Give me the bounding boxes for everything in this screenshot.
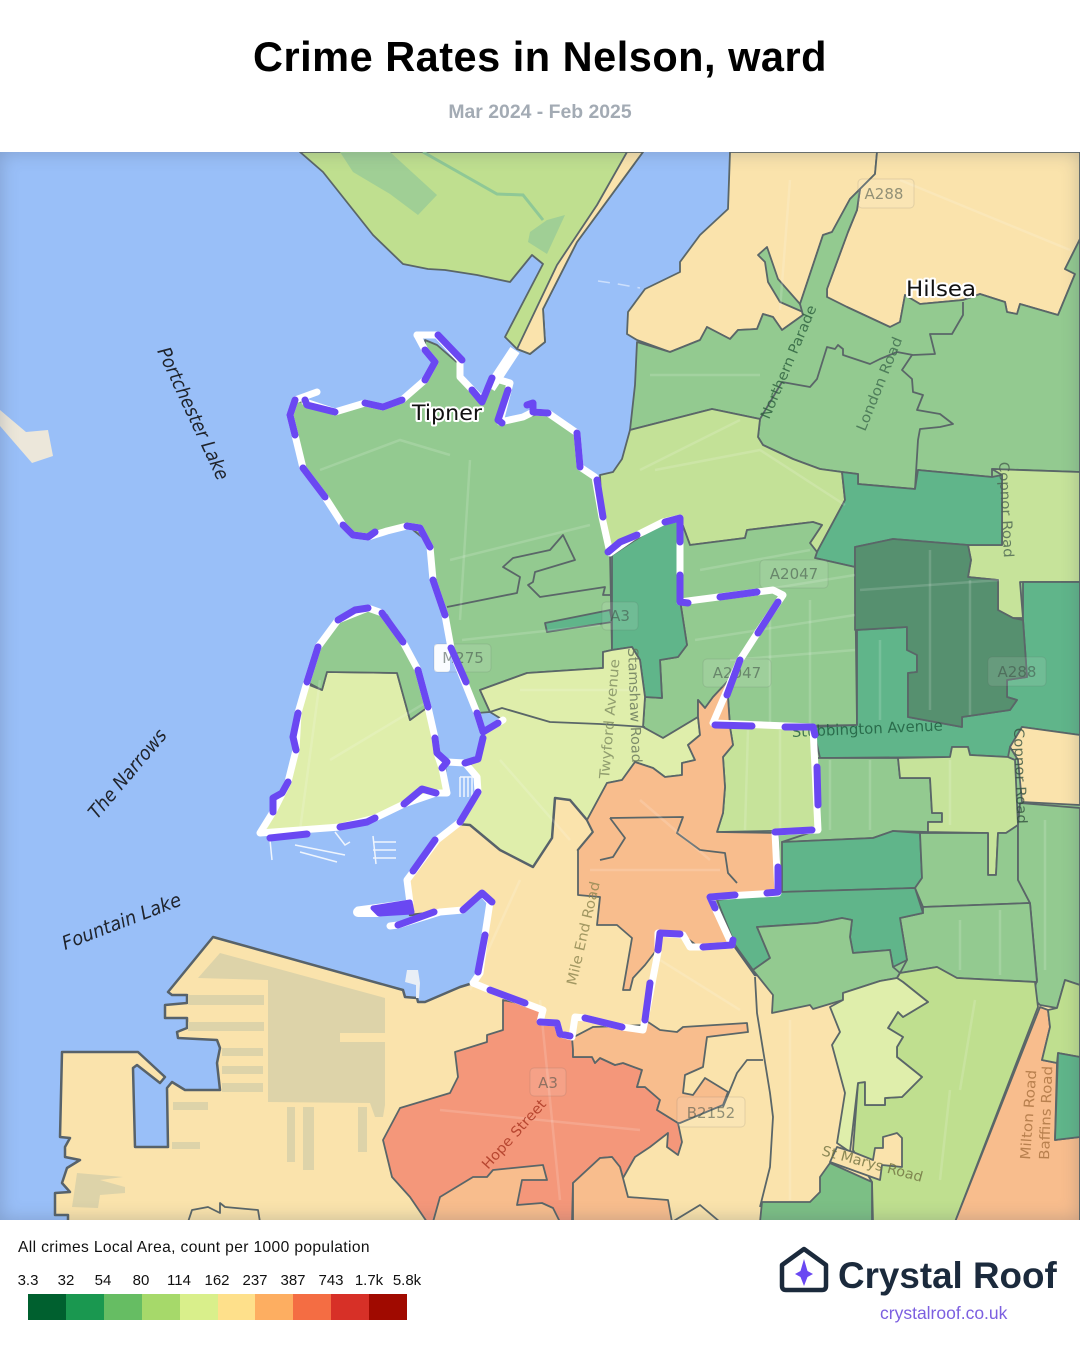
brand name: Crystal Roof: [838, 1255, 1057, 1296]
label: Tipner: Tipner: [411, 401, 482, 425]
legend title: All crimes Local Area, count per 1000 population: [18, 1239, 370, 1256]
street texture: [300, 180, 1070, 1200]
map edge shadow: [0, 152, 1080, 1220]
boundary white casing: [260, 335, 818, 1037]
legend values: 162: [204, 1272, 230, 1289]
shield: M275: M275: [442, 649, 484, 667]
label: Copnor Road south: Copnor Road: [1010, 728, 1029, 824]
regions: south east: [717, 803, 1080, 1222]
legend values: 5.8k: [393, 1272, 421, 1289]
shield: A2047 lower: A2047: [713, 664, 761, 682]
shield: A3 north: A3: [610, 607, 630, 625]
legend values: 237: [242, 1272, 268, 1289]
shield: A2047 upper: [760, 560, 828, 588]
legend values: 54: [95, 1272, 111, 1289]
shield: B2152: [677, 1097, 745, 1127]
legend values: 387: [280, 1272, 306, 1289]
regions: Whale Island: [263, 608, 447, 835]
sub-ward borders: south: [188, 817, 773, 1222]
shield: B2152: B2152: [687, 1104, 735, 1122]
legend values: 1.7k: [355, 1272, 383, 1289]
marina piers: [270, 777, 473, 864]
label: Hilsea: Hilsea: [906, 277, 976, 301]
road name labels: [479, 303, 1056, 1186]
label: Copnor Road north: Copnor Road: [995, 461, 1016, 558]
title: Crime Rates in Nelson, ward: [253, 33, 827, 80]
sub-ward borders: Tipner: [447, 535, 613, 607]
label: The Narrows: The Narrows: [84, 725, 172, 823]
legend values: 80: [133, 1272, 149, 1289]
label: London Road: London Road: [854, 335, 906, 433]
region: southern yellow land: [55, 798, 1080, 1222]
choropleth map: [0, 152, 1080, 1220]
dockyard buildings area: [72, 953, 385, 1208]
legend values: 743: [318, 1272, 344, 1289]
label: Twyford Avenue: Twyford Avenue: [597, 658, 623, 780]
shield: A3 south: [530, 1068, 566, 1096]
label: Fountain Lake: Fountain Lake: [59, 889, 184, 955]
road shields: [434, 179, 1046, 1127]
shield: A2047 lower: [703, 659, 771, 687]
label: Milton Road: Milton Road: [1018, 1069, 1040, 1160]
water background: [0, 152, 1080, 1220]
shield: A3 south: A3: [538, 1074, 558, 1092]
shield: A288 east: [988, 657, 1046, 686]
region: northern pale block: [457, 647, 700, 867]
place labels: [411, 277, 976, 425]
label: Portchester Lake: Portchester Lake: [152, 344, 233, 484]
north land detail: dock and pond: [340, 152, 640, 288]
subtitle: date range: Mar 2024 - Feb 2025: [448, 101, 632, 123]
shield: A288 north: A288: [865, 185, 903, 203]
legend values: 114: [167, 1272, 191, 1289]
label: Stubbington Avenue: Stubbington Avenue: [791, 716, 943, 741]
brand url: crystalroof.co.uk: [880, 1303, 1007, 1323]
shield: A3 north: [602, 602, 638, 630]
east land base: [630, 350, 1080, 1000]
brand block: [780, 1246, 1057, 1323]
boundary thick purple bar at the pier: [373, 902, 412, 914]
ward boundary: Nelson: [260, 335, 818, 1037]
sub-ward border: pale block: [490, 708, 645, 727]
label: Hope Street: Hope Street: [479, 1096, 550, 1173]
shield: M275: [434, 644, 491, 672]
dockyard jetty: [405, 970, 420, 998]
legend values: 32: [58, 1272, 74, 1289]
legend values: 3.3: [18, 1272, 38, 1289]
region: Tipner: [290, 340, 612, 713]
legend values: [18, 1272, 422, 1289]
land: western islet: [0, 410, 53, 463]
label: Northern Parade: Northern Parade: [758, 303, 820, 422]
label: St Marys Road: St Marys Road: [820, 1143, 925, 1186]
water labels: [59, 344, 233, 955]
icon: crystal roof house: [780, 1246, 828, 1292]
legend colour scale: [28, 1294, 407, 1320]
sub-ward borders: north: [760, 302, 963, 489]
regions: north land: [300, 152, 1080, 618]
legend: [18, 1239, 422, 1320]
shield: A288 east: A288: [998, 663, 1036, 681]
regions: city centre: [383, 682, 780, 1222]
label: Stamshaw Road: Stamshaw Road: [624, 648, 644, 763]
boundary purple dashes: [270, 335, 818, 1036]
regions: central green and teal blocks: [612, 518, 1080, 892]
label: Baffins Road: Baffins Road: [1037, 1066, 1056, 1160]
shield: A2047 upper: A2047: [770, 565, 818, 583]
shield: A288 north: [858, 179, 914, 208]
label: Mile End Road: Mile End Road: [564, 880, 604, 987]
